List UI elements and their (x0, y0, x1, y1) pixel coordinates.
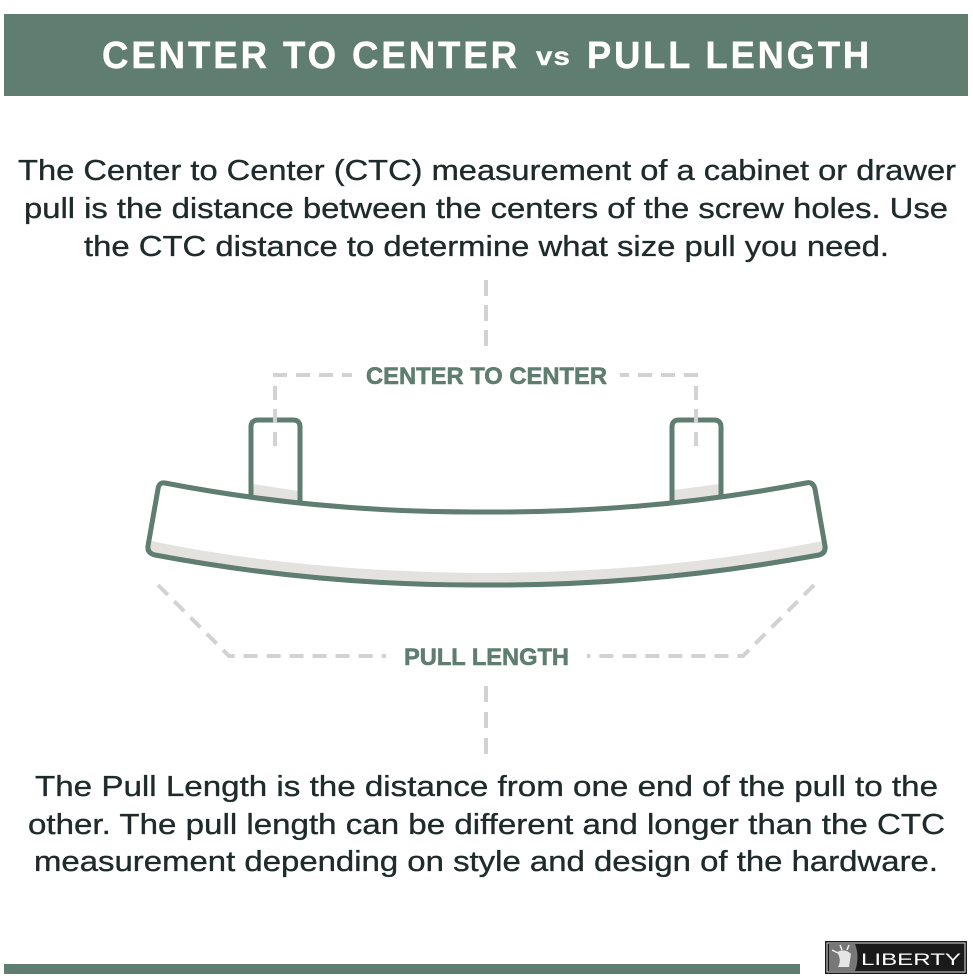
label: center to center: CENTER TO CENTER (366, 363, 607, 390)
right post (672, 420, 721, 503)
title (102, 35, 872, 77)
logo: Liberty: LIBERTY (861, 950, 961, 969)
pull body (148, 483, 825, 585)
pull length text block: other. The pull length can be different and longer than the CTC (28, 809, 945, 841)
label: pull length: PULL LENGTH (404, 644, 569, 671)
dashed bracket: pull length (158, 585, 814, 656)
pull length text block: The Pull Length is the distance from one end of the pull to the (35, 771, 938, 803)
icon: statue of liberty head (829, 944, 858, 971)
title: vs (536, 43, 571, 71)
title: CENTER TO CENTER (102, 35, 520, 77)
left post (251, 420, 300, 503)
intro text block (18, 155, 956, 263)
pull length text block: measurement depending on style and design of the hardware. (34, 846, 938, 878)
intro text block: pull is the distance between the centers of the screw holes. Use (24, 193, 948, 225)
logo: Liberty (825, 941, 967, 974)
pull length text block (28, 771, 945, 878)
dashed connector: bottom center (484, 686, 488, 754)
intro text block: the CTC distance to determine what size pull you need. (84, 231, 889, 263)
dashed bracket: center to center (275, 375, 696, 446)
title: PULL LENGTH (587, 35, 872, 77)
header banner (4, 14, 968, 96)
dashed connector: top center (484, 280, 488, 346)
diagram: cabinet pull (148, 420, 825, 585)
footer bar (4, 964, 800, 974)
intro text block: The Center to Center (CTC) measurement of a cabinet or drawer (18, 155, 956, 187)
